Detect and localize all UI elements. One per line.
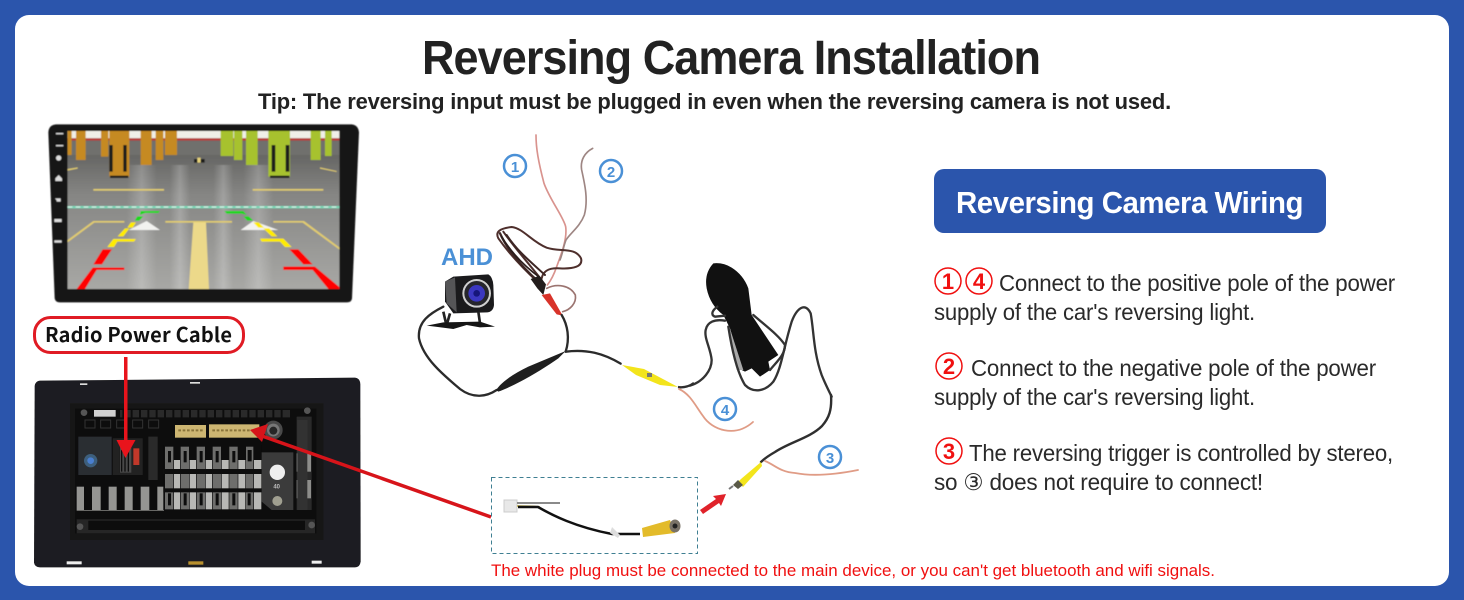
instruction: 3: 3	[943, 439, 955, 464]
marker: 2: 2	[607, 164, 615, 181]
diagram: camera wiring	[419, 135, 858, 489]
tip subtitle: Tip: The reversing input must be plugged in even when the reversing camera is not used.	[258, 89, 1171, 114]
instruction: 3: The reversing trigger is controlled by stereo,	[969, 440, 1393, 466]
instruction: 3: so ③ does not require to connect!	[934, 469, 1263, 495]
marker: 3	[819, 446, 841, 468]
brown twisted wires	[497, 227, 581, 312]
instruction: 1 and 4: supply of the car's reversing light.	[934, 299, 1255, 325]
cable coil and loops	[690, 263, 832, 397]
instruction: 2: supply of the car's reversing light.	[934, 384, 1255, 410]
inset: adapter cable with white plug	[492, 478, 698, 554]
leads, camera and splitter	[419, 135, 621, 396]
instruction: 1 and 4: 4	[973, 269, 986, 294]
marker: 1	[504, 155, 526, 177]
marker: 4: 4	[721, 402, 730, 419]
arrow: white plug to radio connector	[250, 424, 491, 517]
panel: radio screen with reversing camera view	[48, 124, 359, 302]
arrow: power cable pointer	[116, 357, 136, 458]
instruction: 1 and 4	[934, 268, 1396, 325]
instruction: 2: Connect to the negative pole of the power	[971, 355, 1377, 381]
red note: The white plug must be connected to the main device, or you can't get bluetooth and wifi signals.	[491, 561, 1215, 580]
arrow: adapter to RCA plug	[700, 494, 726, 514]
instruction: 1 and 4: Connect to the positive pole of the power	[999, 270, 1396, 296]
callout: Radio Power Cable: Radio Power Cable	[45, 319, 232, 348]
marker: 2	[600, 160, 622, 182]
yellow RCA coupler 1	[622, 365, 678, 387]
inline sleeve	[496, 351, 566, 392]
heading button: Reversing Camera Wiring	[934, 169, 1326, 233]
heading button: Reversing Camera Wiring: Reversing Camera Wiring	[956, 185, 1303, 220]
connector block and vents: 40	[273, 484, 281, 490]
instruction: 3	[934, 438, 1393, 495]
label: AHD: AHD	[441, 244, 493, 271]
marker: 4	[714, 398, 736, 420]
marker: 3: 3	[826, 450, 834, 467]
yellow RCA plug	[729, 462, 762, 489]
camera body	[445, 274, 494, 313]
panel: radio rear view with connectors	[34, 378, 361, 567]
connector block and vents	[163, 420, 307, 510]
splitter sleeve	[531, 276, 546, 295]
instruction: 2: 2	[943, 354, 955, 379]
orange leads 4 and 3	[679, 389, 858, 475]
cable to RCA plug	[761, 395, 831, 462]
instruction: 2	[934, 353, 1377, 410]
instruction: 1 and 4: 1	[942, 269, 954, 294]
black cable	[419, 307, 621, 396]
marker: 1: 1	[511, 159, 519, 176]
title: Reversing Camera Installation	[422, 32, 1040, 85]
red lead 1 and grey lead 2	[536, 135, 593, 285]
